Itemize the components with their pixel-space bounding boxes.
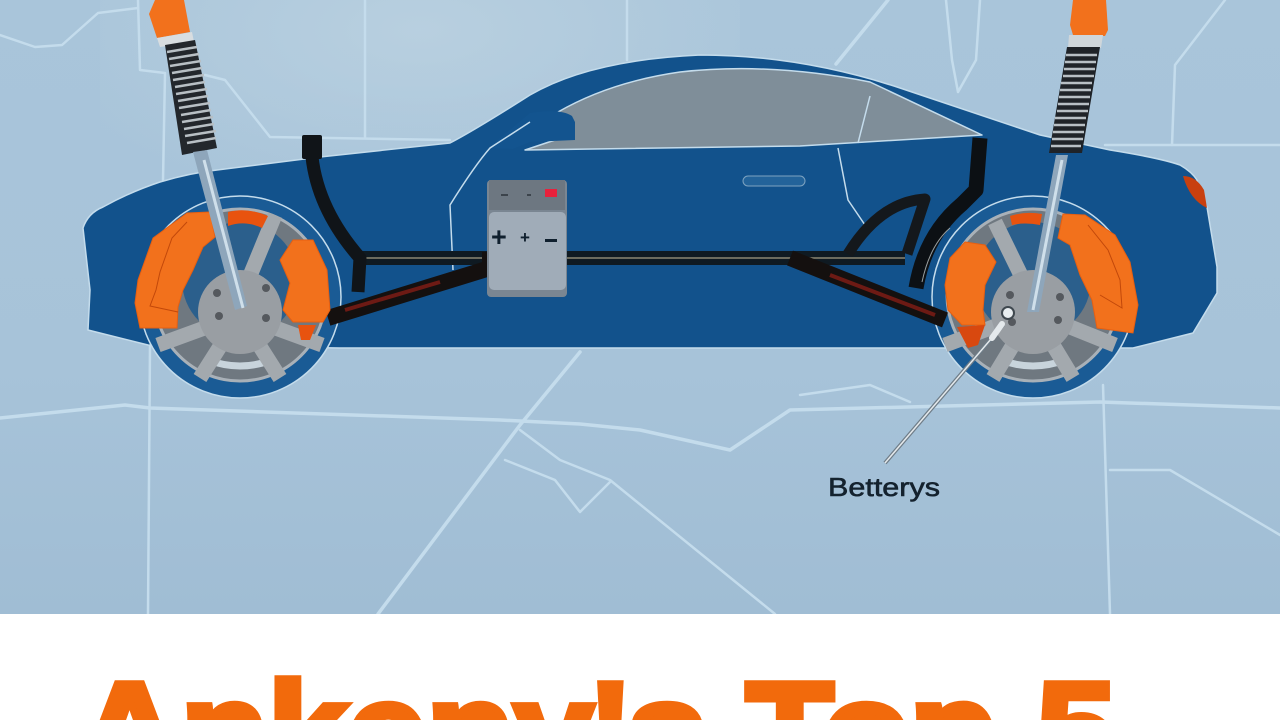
right strut [1027, 0, 1108, 312]
battery small plus: + [520, 228, 530, 247]
callout pointer [885, 307, 1014, 463]
callout label: Betterys [828, 472, 940, 502]
left brake bit [298, 325, 316, 340]
right brake bit [957, 325, 985, 348]
right brake arc [1010, 213, 1042, 225]
rear light [1183, 176, 1207, 208]
left strut [149, 0, 247, 310]
side mirror [488, 111, 575, 149]
left brake pad [280, 240, 330, 322]
door line [450, 122, 865, 270]
battery symbols: + [491, 222, 507, 252]
left brake arc [228, 210, 268, 228]
right brake pad [945, 242, 996, 325]
battery minus [545, 239, 557, 242]
left caliper [135, 212, 215, 328]
battery [487, 180, 567, 297]
right caliper [1058, 214, 1138, 333]
window [525, 69, 982, 150]
car illustration [83, 0, 1217, 398]
left caliper details [150, 222, 187, 312]
left wheel [139, 196, 341, 398]
right caliper details [1088, 225, 1122, 308]
door handle [743, 176, 805, 186]
suspension arms [302, 135, 980, 320]
window pillar [858, 96, 870, 143]
car body [83, 55, 1217, 348]
white footer band [0, 614, 1280, 720]
right wheel [932, 196, 1134, 398]
